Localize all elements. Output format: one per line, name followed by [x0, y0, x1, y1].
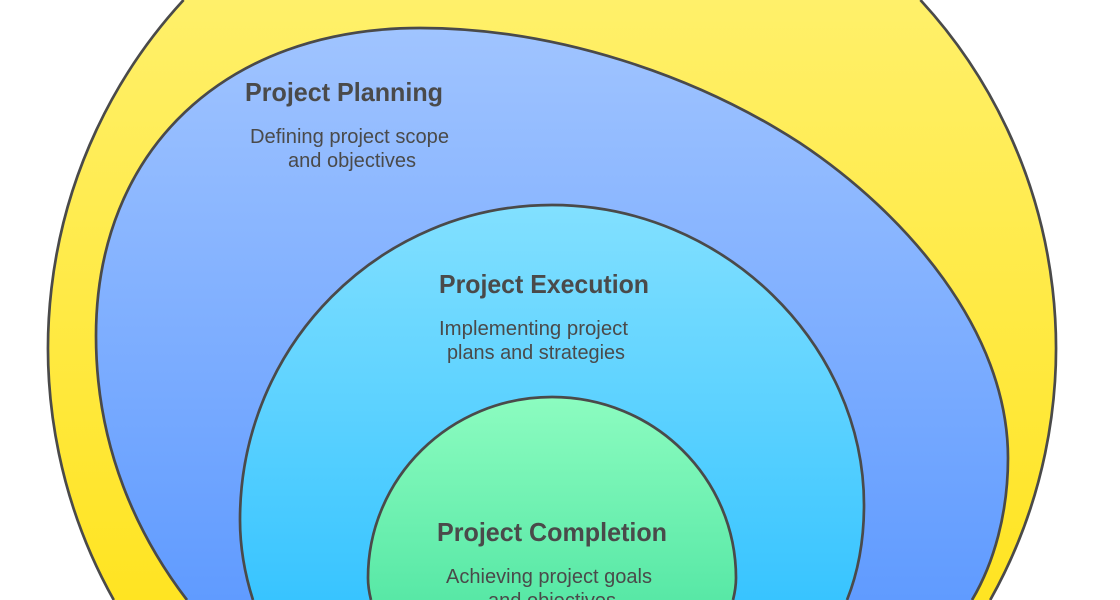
text: completion description: Achieving project goals [446, 566, 652, 588]
heading: project execution: Project Execution [439, 269, 649, 299]
heading: project completion: Project Completion [437, 517, 667, 547]
panel: project planning [96, 28, 1008, 600]
heading: project planning: Project Planning [245, 77, 443, 107]
panel: project execution [240, 205, 864, 600]
text: execution description: plans and strategies [447, 342, 625, 364]
text: planning description [250, 126, 449, 172]
text: completion description [446, 566, 652, 600]
text: planning description: and objectives [288, 150, 416, 172]
text: planning description: Defining project scope [250, 126, 449, 148]
panel: project completion [368, 397, 736, 600]
text: execution description: Implementing project [439, 318, 628, 340]
text: execution description [439, 318, 628, 364]
